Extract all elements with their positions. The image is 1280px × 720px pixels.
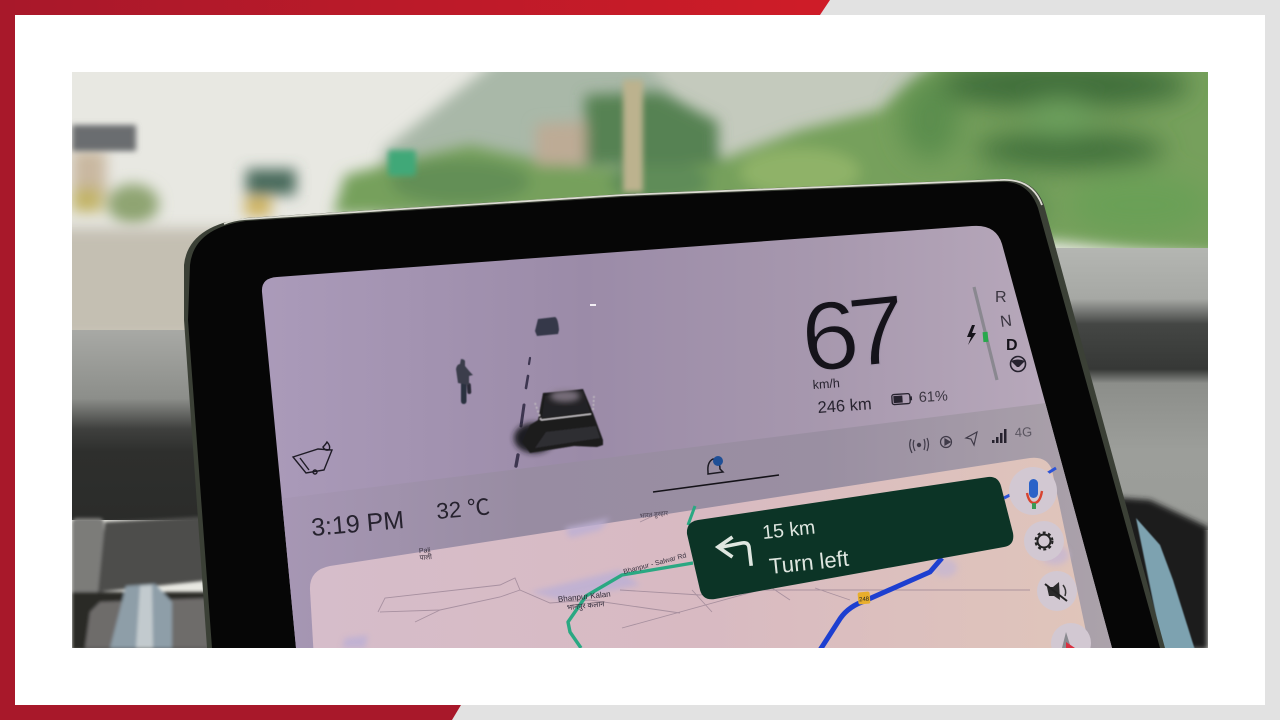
icon: wiper control bbox=[293, 442, 332, 474]
gear selector: D bbox=[1006, 337, 1018, 354]
map button: compass bbox=[1051, 623, 1091, 648]
map: place label Bhanpur Kalan bbox=[558, 592, 610, 611]
clock text: 3:19 PM bbox=[310, 506, 405, 542]
photo: steering wheel rim lower right bbox=[1123, 494, 1208, 648]
map: road label Bhanpur-Salwar Rd: Bhanpur - Salwar Rd bbox=[623, 552, 687, 576]
map: highway badge bbox=[857, 591, 871, 605]
display: upper driving view background bbox=[250, 215, 1130, 655]
tablet: black display bezel bbox=[188, 182, 1160, 648]
photo: left dashboard band bbox=[72, 330, 212, 520]
map: thin minor roads bbox=[378, 515, 1030, 628]
icon: power bolt bbox=[967, 325, 976, 345]
navigation card: instruction: Turn left bbox=[768, 546, 850, 579]
icon: signal bars bbox=[992, 429, 1006, 443]
range: 246 km: 246 km bbox=[817, 395, 872, 417]
map: green route upper stub bbox=[688, 506, 695, 525]
map: place label Bhanpur Kalan: भानपुर कलान bbox=[566, 599, 606, 613]
map: green route bbox=[568, 563, 693, 648]
photo: stalk lever bbox=[1136, 518, 1195, 650]
icon: notification bell bbox=[708, 456, 723, 474]
navigation card: left turn arrow bbox=[718, 538, 751, 564]
tablet: light top edge highlight bbox=[224, 180, 1042, 224]
icon: battery bbox=[892, 393, 912, 405]
map: place label Pali bbox=[419, 547, 432, 560]
map: place label Bhanpur Kalan: Bhanpur Kalan bbox=[557, 589, 611, 604]
regen bar: power gauge bbox=[974, 287, 997, 380]
map: water and terrain patches bbox=[342, 518, 1069, 648]
navigation card: turn instruction bbox=[687, 477, 1013, 599]
road: white speck bbox=[590, 304, 596, 306]
gear selector: N bbox=[999, 313, 1013, 331]
speed readout: 67: 67 bbox=[796, 275, 911, 393]
icon: steering wheel bbox=[1010, 356, 1026, 372]
display: map panel bbox=[310, 458, 1092, 660]
gear selector bbox=[995, 289, 1018, 354]
map: blue route behind mic button bbox=[1004, 468, 1056, 498]
map button: microphone bbox=[1009, 467, 1057, 515]
status text: 4G: 4G bbox=[1014, 424, 1032, 440]
map: upper place label: भारत हुरहार bbox=[639, 510, 669, 521]
map: blue navigation route bbox=[820, 558, 942, 650]
vehicle: car ahead bbox=[535, 317, 559, 336]
vehicle: own pickup truck bbox=[514, 389, 603, 453]
map: place label Pali: Pali bbox=[419, 547, 431, 555]
battery percentage: 61% bbox=[918, 388, 948, 406]
display: status band divider line bbox=[653, 475, 779, 492]
map button: mute sound bbox=[1037, 571, 1077, 611]
photo: road surface bbox=[72, 222, 226, 330]
map button: settings gear bbox=[1024, 521, 1064, 561]
map: highway badge: 248 bbox=[859, 597, 870, 603]
display: touchscreen content bbox=[250, 215, 1130, 663]
gear selector: R bbox=[995, 289, 1007, 306]
icon: navigation arrow bbox=[966, 432, 977, 445]
vehicle: motorcycle rider bbox=[456, 359, 473, 404]
map: place label Pali: पाली bbox=[419, 552, 432, 562]
road: lane markings bbox=[516, 358, 530, 466]
tablet: outer rim of the bezel bbox=[184, 179, 1165, 648]
icon: connectivity waves bbox=[910, 438, 928, 453]
temperature text: 32 ℃ bbox=[435, 494, 491, 524]
speed unit: km/h: km/h bbox=[812, 376, 840, 392]
photo: centre console vents bbox=[72, 516, 207, 648]
status icons row bbox=[910, 429, 1006, 453]
navigation card: distance: 15 km bbox=[761, 517, 816, 544]
photo: blurred road scene behind the display bbox=[40, 50, 1240, 650]
photo: right dashboard band bbox=[1056, 248, 1208, 530]
icon: play circle bbox=[940, 436, 952, 448]
display: status band bbox=[270, 403, 1120, 660]
